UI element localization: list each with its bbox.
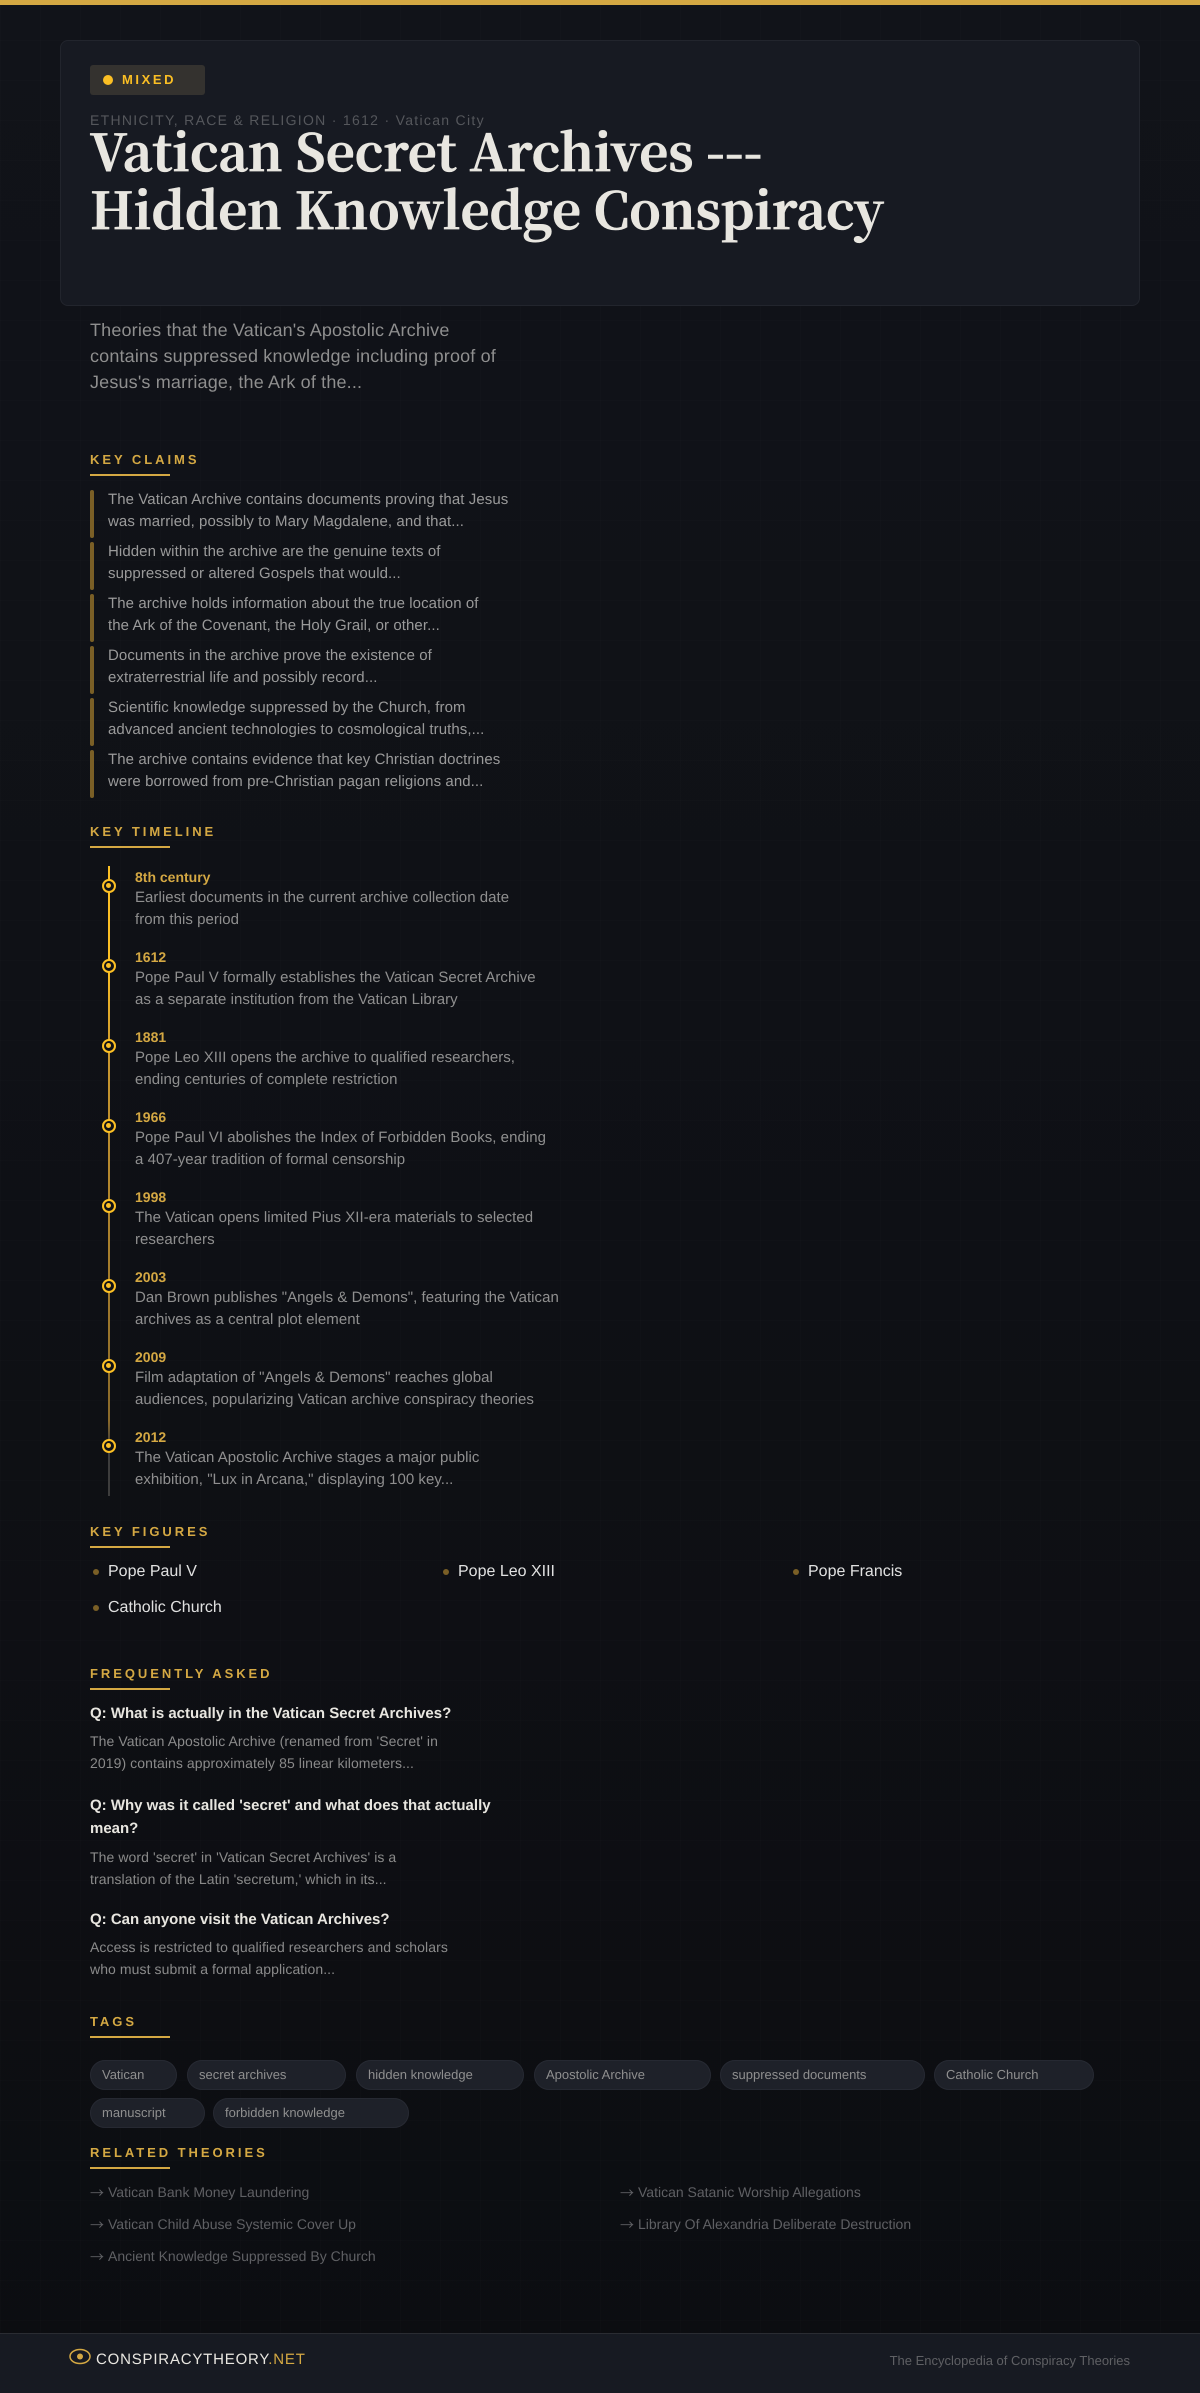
event: 2003: 2003 (135, 1269, 166, 1285)
badge: mixed verdict (90, 65, 205, 95)
link: Vatican Bank Money Laundering: → (90, 2183, 104, 2203)
link: Library Of Alexandria Deliberate Destruction: → (620, 2215, 634, 2235)
event: 1998 (102, 1189, 533, 1248)
claim 1: was married, possibly to Mary Magdalene, and that... (108, 513, 464, 530)
event: 2009: audiences, popularizing Vatican archive conspiracy theories (135, 1390, 534, 1408)
claim 5: advanced ancient technologies to cosmological truths,... (108, 721, 484, 738)
link: Vatican Bank Money Laundering: Vatican Bank Money Laundering (108, 2184, 309, 2200)
claim 5 (90, 698, 484, 746)
heading: related theories: RELATED THEORIES (90, 2145, 268, 2160)
event: 1966 (102, 1109, 546, 1168)
claim 2: suppressed or altered Gospels that would... (108, 565, 401, 582)
title: Vatican Secret Archives --- (90, 113, 762, 186)
description: contains suppressed knowledge including proof of (90, 346, 496, 366)
title: Hidden Knowledge Conspiracy (90, 171, 884, 244)
section: key figures (90, 1524, 902, 1616)
timeline line (108, 866, 110, 1496)
top accent bar (0, 0, 1200, 5)
tag: Vatican (90, 2060, 177, 2090)
tag: Catholic Church (934, 2060, 1094, 2090)
event: 1881: Pope Leo XIII opens the archive to qualified researchers, (135, 1048, 515, 1066)
claim 2: Hidden within the archive are the genuine texts of (108, 543, 441, 560)
tag: Apostolic Archive: Apostolic Archive (546, 2067, 645, 2082)
section: related theories (90, 2145, 911, 2267)
event: 2012: 2012 (135, 1429, 166, 1445)
tag: Apostolic Archive (534, 2060, 711, 2090)
link: Library Of Alexandria Deliberate Destruction: Library Of Alexandria Deliberate Destruction (638, 2216, 911, 2232)
heading: key claims: KEY CLAIMS (90, 452, 199, 467)
icon: status dot (103, 75, 113, 85)
heading: tags: TAGS (90, 2014, 137, 2029)
event: 2012: exhibition, "Lux in Arcana," displaying 100 key... (135, 1470, 453, 1488)
event: 1998: The Vatican opens limited Pius XII-era materials to selected (135, 1208, 533, 1226)
claim 2 (90, 542, 441, 590)
link: Vatican Satanic Worship Allegations: Vatican Satanic Worship Allegations (638, 2184, 861, 2200)
event: 8th century: 8th century (135, 869, 210, 885)
event: 2003: archives as a central plot element (135, 1310, 360, 1328)
claim 4: extraterrestrial life and possibly record... (108, 669, 377, 686)
answer 2 (90, 1849, 396, 1887)
event: 1966: 1966 (135, 1109, 166, 1125)
answer 2: translation of the Latin 'secretum,' which in its... (90, 1871, 387, 1887)
event: 8th century (102, 869, 509, 928)
event: 1881 (102, 1029, 515, 1088)
link: Ancient Knowledge Suppressed By Church: Ancient Knowledge Suppressed By Church (108, 2248, 376, 2264)
meta line: ETHNICITY, RACE & RELIGION · 1612 · Vatican City (90, 112, 485, 128)
question 3: Q: Can anyone visit the Vatican Archives? (90, 1911, 390, 1928)
claim 4 (90, 646, 432, 694)
heading: key timeline: KEY TIMELINE (90, 824, 216, 839)
event: 1966: Pope Paul VI abolishes the Index of Forbidden Books, ending (135, 1128, 546, 1146)
question 2 (90, 1797, 491, 1837)
tag: hidden knowledge: hidden knowledge (368, 2067, 473, 2082)
event: 1998: 1998 (135, 1189, 166, 1205)
section: tags (90, 2014, 1094, 2128)
answer 2: The word 'secret' in 'Vatican Secret Archives' is a (90, 1849, 396, 1865)
tag: suppressed documents (720, 2060, 925, 2090)
event: 1881: 1881 (135, 1029, 166, 1045)
claim 3: the Ark of the Covenant, the Holy Grail, or other... (108, 617, 440, 634)
answer 1 (90, 1733, 438, 1771)
event: 2003 (102, 1269, 559, 1328)
tag: manuscript: manuscript (102, 2105, 166, 2120)
claim 3 (90, 594, 479, 642)
answer 1: The Vatican Apostolic Archive (renamed from 'Secret' in (90, 1733, 438, 1749)
question 2: Q: Why was it called 'secret' and what does that actually (90, 1797, 491, 1814)
tag: Vatican: Vatican (102, 2067, 144, 2082)
section: FAQ (90, 1666, 491, 1977)
tag: hidden knowledge (356, 2060, 524, 2090)
figure: Pope Paul V: Pope Paul V (108, 1563, 197, 1580)
event: 2012 (102, 1429, 479, 1488)
site name: CONSPIRACYTHEORY.NET (96, 2351, 306, 2368)
link: Vatican Child Abuse Systemic Cover Up: → (90, 2215, 104, 2235)
section: key timeline (90, 824, 559, 1496)
description: Theories that the Vatican's Apostolic Archive (90, 320, 450, 340)
claim 6: were borrowed from pre-Christian pagan religions and... (108, 773, 483, 790)
claim 1 (90, 490, 508, 538)
answer 3: Access is restricted to qualified researchers and scholars (90, 1939, 448, 1955)
tag: manuscript (90, 2098, 205, 2128)
event: 2012: The Vatican Apostolic Archive stages a major public (135, 1448, 479, 1466)
claim 4: Documents in the archive prove the existence of (108, 647, 432, 664)
event: 1612: Pope Paul V formally establishes the Vatican Secret Archive (135, 968, 536, 986)
event: 1966: a 407-year tradition of formal censorship (135, 1150, 405, 1168)
event: 8th century: Earliest documents in the current archive collection date (135, 888, 509, 906)
heading: frequently asked: FREQUENTLY ASKED (90, 1666, 273, 1681)
event: 1612: 1612 (135, 949, 166, 965)
figure: Pope Leo XIII: Pope Leo XIII (458, 1563, 555, 1580)
claim 6 (90, 750, 500, 798)
answer 3 (90, 1939, 448, 1977)
event: 1612: as a separate institution from the Vatican Library (135, 990, 458, 1008)
event: 2009: 2009 (135, 1349, 166, 1365)
title (90, 113, 884, 244)
tag: forbidden knowledge: forbidden knowledge (225, 2105, 345, 2120)
link: Vatican Satanic Worship Allegations: → (620, 2183, 634, 2203)
event: 2009: Film adaptation of "Angels & Demons" reaches global (135, 1368, 493, 1386)
answer 1: 2019) contains approximately 85 linear kilometers... (90, 1755, 414, 1771)
link: Ancient Knowledge Suppressed By Church: → (90, 2247, 104, 2267)
panel: header (60, 40, 1140, 306)
claim 6: The archive contains evidence that key Christian doctrines (108, 751, 500, 768)
badge label: MIXED (122, 72, 176, 87)
footer (0, 2333, 1200, 2393)
figure: Pope Francis: Pope Francis (808, 1563, 902, 1580)
tag: Catholic Church: Catholic Church (946, 2067, 1038, 2082)
figure: Catholic Church: Catholic Church (108, 1599, 222, 1616)
answer 3: who must submit a formal application... (90, 1961, 335, 1977)
event: 1998: researchers (135, 1230, 215, 1248)
heading: key figures: KEY FIGURES (90, 1524, 210, 1539)
section: key claims (90, 452, 508, 798)
event: 1612 (102, 949, 536, 1008)
tag: suppressed documents: suppressed documents (732, 2067, 866, 2082)
description (90, 320, 496, 392)
description: Jesus's marriage, the Ark of the... (90, 372, 362, 392)
event: 1881: ending centuries of complete restriction (135, 1070, 398, 1088)
event: 2009 (102, 1349, 534, 1408)
event: 8th century: from this period (135, 910, 239, 928)
claim 5: Scientific knowledge suppressed by the Church, from (108, 699, 466, 716)
tag: forbidden knowledge (213, 2098, 409, 2128)
claim 1: The Vatican Archive contains documents proving that Jesus (108, 491, 508, 508)
claim 3: The archive holds information about the true location of (108, 595, 479, 612)
event: 2003: Dan Brown publishes "Angels & Demons", featuring the Vatican (135, 1288, 559, 1306)
footer tagline: The Encyclopedia of Conspiracy Theories (890, 2353, 1130, 2368)
question 2: mean? (90, 1820, 138, 1837)
tag: secret archives (187, 2060, 346, 2090)
icon: eye logo (69, 2348, 91, 2365)
link: Vatican Child Abuse Systemic Cover Up: Vatican Child Abuse Systemic Cover Up (108, 2216, 356, 2232)
question 1: Q: What is actually in the Vatican Secret Archives? (90, 1705, 451, 1722)
tag: secret archives: secret archives (199, 2067, 286, 2082)
